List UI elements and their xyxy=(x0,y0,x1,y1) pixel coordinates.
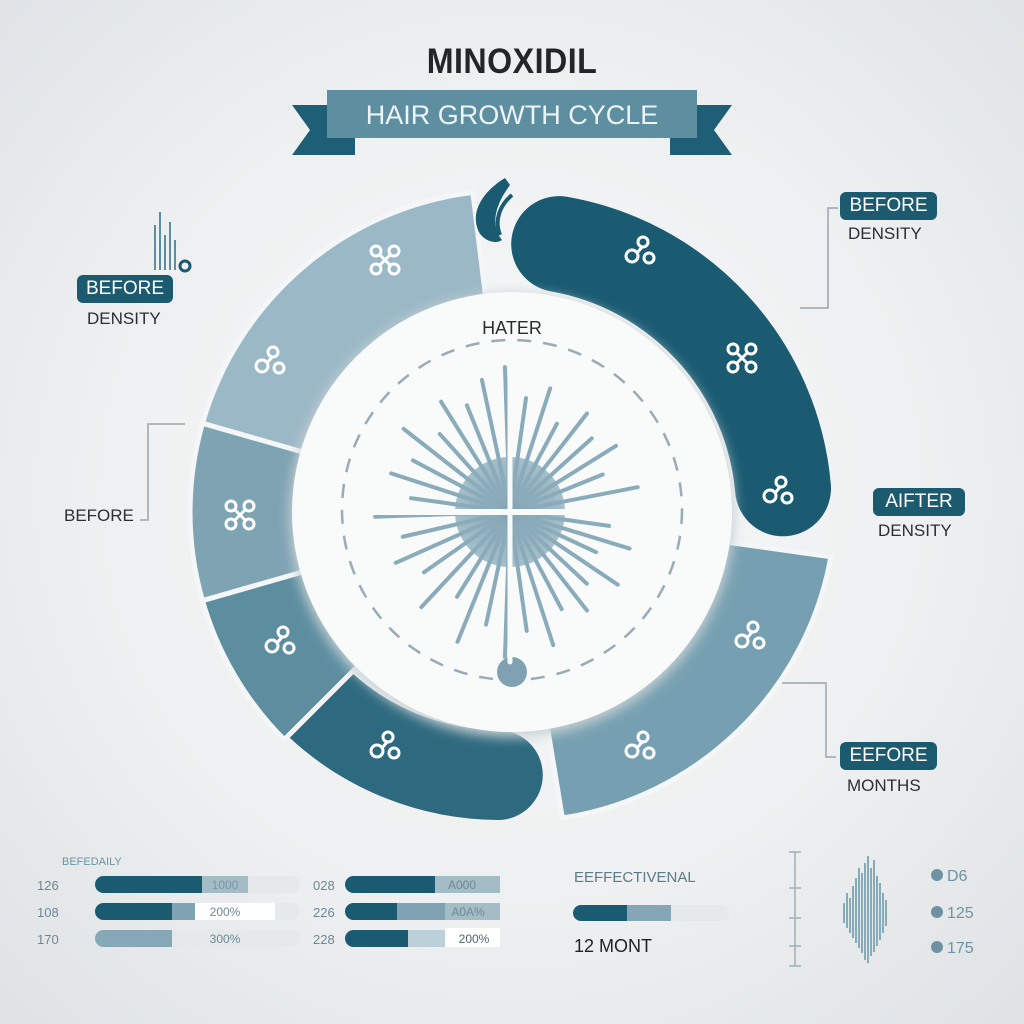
bar chart: density comparison: 028 xyxy=(313,878,335,893)
segment: bottom dark xyxy=(320,704,498,775)
waveform chart with legend xyxy=(789,851,974,967)
segment: lower left xyxy=(202,512,512,740)
waveform chart with legend: 175 xyxy=(947,940,974,957)
label: before density left xyxy=(77,275,173,328)
effectiveness panel: 12 MONT xyxy=(574,936,652,956)
segment: top-left light xyxy=(202,192,512,512)
bar chart: density comparison: 228 xyxy=(313,932,335,947)
segment: top right dark xyxy=(559,244,783,488)
label: after density: DENSITY xyxy=(878,521,952,540)
icon: hair strand xyxy=(476,178,510,242)
bar chart: density comparison: A000 xyxy=(448,878,476,892)
label: before density right: BEFORE xyxy=(849,195,928,216)
ribbon banner: HAIR GROWTH CYCLE xyxy=(366,100,658,130)
bar chart: density comparison: 126 xyxy=(37,878,59,893)
effectiveness panel xyxy=(573,869,696,956)
center label: HATER xyxy=(482,318,542,338)
segment: left xyxy=(190,423,512,601)
label: before density left: BEFORE xyxy=(86,278,164,299)
bar chart: density comparison: 108 xyxy=(37,905,59,920)
label: before density right xyxy=(840,192,937,243)
inner circle xyxy=(290,293,734,737)
label: before months: MONTHS xyxy=(847,776,921,795)
label: before density right: DENSITY xyxy=(848,224,922,243)
dashed circle xyxy=(342,340,682,680)
bar chart: density comparison: 226 xyxy=(313,905,335,920)
label: after density: AIFTER xyxy=(885,491,953,512)
label: before months: EEFORE xyxy=(849,745,928,766)
bar chart: density comparison: 300% xyxy=(210,932,241,946)
bar chart: density comparison: 200% xyxy=(459,932,490,946)
label: before months xyxy=(840,742,937,795)
title: MINOXIDIL xyxy=(427,42,597,81)
segment icons xyxy=(226,237,792,758)
bar chart: density comparison: BEFEDAILY xyxy=(62,856,122,868)
bar chart: density comparison: 200% xyxy=(210,905,241,919)
bar chart: density comparison xyxy=(37,856,500,947)
burst graphic xyxy=(370,362,650,662)
bar chart: density comparison: A0A% xyxy=(451,905,485,919)
waveform chart with legend: D6 xyxy=(947,868,968,885)
label: after density xyxy=(873,488,965,540)
effectiveness panel: EEFFECTIVENAL xyxy=(574,869,696,886)
label: before density left: DENSITY xyxy=(87,309,161,328)
bar chart: density comparison: 170 xyxy=(37,932,59,947)
waveform chart with legend: 125 xyxy=(947,905,974,922)
label: before left: BEFORE xyxy=(64,506,134,525)
ribbon banner xyxy=(292,90,732,155)
center dot xyxy=(497,657,527,687)
icon: small hair spikes xyxy=(155,212,190,271)
connectors xyxy=(140,208,838,757)
bar chart: density comparison: 1000 xyxy=(212,878,239,892)
segment: bottom right xyxy=(512,512,831,818)
